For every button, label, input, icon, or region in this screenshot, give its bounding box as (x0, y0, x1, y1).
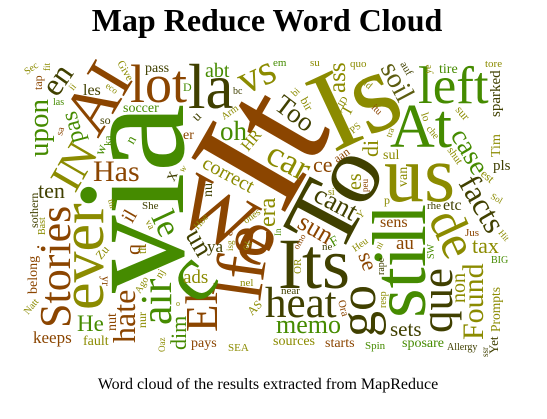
word: non: non (448, 273, 470, 303)
small words: bir (297, 94, 316, 113)
small words: Ora (335, 299, 351, 318)
small words: SEA (228, 342, 249, 354)
small words: SW (426, 243, 437, 259)
small words: ye (423, 64, 434, 74)
small words: Heu (350, 236, 370, 254)
small words: quo (350, 58, 367, 70)
small words: Ago (133, 275, 151, 296)
word: que: que (412, 268, 462, 333)
small words: resp (378, 291, 389, 308)
word: pas: pas (56, 109, 90, 146)
small words: p (384, 193, 390, 207)
small words: ni (373, 240, 385, 251)
small words: near (281, 285, 300, 297)
small words: nu (201, 183, 216, 197)
small words: She (142, 200, 159, 212)
small words: rhe (427, 200, 441, 212)
small words: Spin (365, 340, 386, 352)
small words: tap (31, 75, 45, 90)
word: us: us (384, 131, 455, 219)
small words: Y (355, 208, 367, 221)
small words: ones (241, 207, 263, 226)
word: ce: ce (313, 152, 333, 177)
small words: . (36, 232, 40, 252)
word: correct: correct (199, 152, 258, 198)
word: cant: cant (309, 179, 363, 227)
small words: em (273, 57, 287, 69)
small words: au (396, 233, 414, 254)
small words: Zu (93, 243, 112, 262)
small words: so (100, 113, 111, 127)
small words: Bast (37, 217, 48, 235)
small words: che (424, 124, 441, 142)
word: Has: Has (93, 155, 140, 188)
small words: ne (322, 241, 332, 253)
small words: starts (325, 336, 355, 351)
small words: sources (273, 334, 315, 349)
small words: b (125, 244, 150, 255)
small words: F (328, 233, 342, 250)
word: ass: ass (324, 62, 351, 93)
small words: n (123, 133, 140, 147)
small words: sul (383, 148, 399, 163)
small words: tire (439, 62, 458, 77)
small words: il (117, 205, 142, 226)
word: ads: ads (183, 267, 208, 288)
word: soil: soil (374, 57, 420, 107)
word: en: en (33, 57, 80, 102)
small words: Arm (219, 103, 241, 122)
word: le: le (144, 205, 188, 243)
word: abt: abt (205, 60, 230, 82)
word: de: de (418, 200, 489, 266)
small words: nur (135, 312, 149, 328)
word: At: At (390, 93, 452, 161)
small words: sposare (402, 336, 444, 351)
small words: Allergy (447, 342, 477, 353)
word: air: air (132, 278, 181, 325)
small words: auf (397, 60, 415, 78)
title: Map Reduce Word Cloud (92, 2, 442, 38)
word: El: El (177, 292, 227, 332)
word: AI: AI (48, 49, 147, 147)
small words: Prompts (488, 287, 503, 332)
small words: keeps (33, 328, 72, 347)
word: He: He (77, 311, 104, 336)
word: ten: ten (38, 178, 65, 203)
small words: las (53, 97, 64, 108)
small words: belong (26, 256, 41, 294)
word: It: It (155, 56, 364, 235)
small words: sid (358, 76, 374, 92)
word: Stories: Stories (31, 206, 80, 328)
small words: fault (83, 334, 109, 349)
small words: yr (99, 276, 113, 286)
small words: w (93, 142, 111, 157)
small words: tra (383, 126, 396, 139)
small words: pays (191, 336, 217, 351)
small words: Yet (486, 336, 501, 354)
small words: ID (336, 95, 351, 110)
small words: si (328, 187, 335, 198)
word: To: To (263, 128, 406, 268)
small words: PS (348, 121, 363, 136)
small words: bi (289, 86, 303, 99)
small words: sur (453, 103, 473, 123)
small words: shut (445, 145, 465, 167)
small words: D (183, 80, 192, 94)
word: We: We (162, 157, 296, 284)
small words: etc (443, 197, 462, 214)
small words: pls (493, 158, 511, 174)
word: lfe: lfe (200, 220, 286, 304)
small words: thr (106, 198, 118, 210)
small words: fit (42, 63, 52, 71)
word: lot: lot (130, 54, 187, 114)
small words: lo (418, 111, 433, 124)
small words: Jus (465, 227, 479, 239)
small words: peu (360, 179, 370, 192)
small words (22, 57, 512, 357)
word: era: era (255, 197, 281, 227)
small words: Sol (489, 191, 505, 206)
word: facts: facts (452, 168, 513, 239)
small words: ii (67, 81, 79, 93)
word: HR: HR (238, 126, 266, 155)
small words: th (135, 245, 149, 254)
small words: tore (485, 58, 502, 70)
small words: Hit (496, 228, 512, 243)
small words: itu (369, 102, 384, 118)
small words: aan (331, 144, 352, 165)
word: es: es (344, 173, 366, 190)
word: Its: Its (278, 224, 350, 304)
word: upon: upon (23, 98, 55, 157)
small words: ya (207, 237, 224, 256)
small words: x (159, 167, 181, 184)
small words: Natt (22, 296, 42, 317)
small words: ka (102, 136, 114, 146)
small words: van (396, 167, 411, 187)
small words: Hoe (192, 212, 211, 232)
small words: nut (105, 313, 120, 331)
word: un: un (180, 223, 220, 262)
word: hate: hate (106, 290, 142, 343)
word: left: left (418, 57, 489, 115)
word: memo: memo (276, 310, 341, 339)
small words: o (176, 299, 180, 308)
word: ever: ever (49, 203, 117, 310)
word: vs: vs (230, 47, 283, 104)
small words: soccer (123, 101, 159, 116)
word: go: go (330, 285, 387, 337)
word: sets: sets (390, 317, 422, 341)
word: IN: IN (40, 133, 107, 199)
word: Is: Is (290, 25, 419, 176)
small words: BIG (491, 255, 508, 266)
word: case: case (444, 123, 495, 180)
small words: pass (145, 61, 169, 76)
small words: Give (114, 58, 136, 83)
caption: Word cloud of the results extracted from MapReduce (98, 376, 438, 393)
small words: rape (376, 257, 387, 275)
small words: isg (225, 240, 235, 251)
small words: sens (380, 214, 408, 231)
small words: eco (104, 80, 120, 96)
word: heat: heat (265, 280, 337, 327)
small words: Sec (22, 60, 41, 77)
small words: est (478, 167, 498, 186)
word cloud (22, 25, 513, 357)
word: c: c (145, 235, 235, 319)
small words: er (183, 128, 194, 143)
small words: bc (233, 86, 243, 97)
small words: su (310, 57, 320, 69)
word: di: di (358, 140, 383, 157)
small words: Oaz (157, 338, 167, 352)
small words: sa (54, 125, 67, 137)
small words: nj (153, 267, 168, 280)
small words: OR (292, 258, 304, 274)
word: still: still (358, 204, 442, 318)
small words: ssr (480, 347, 490, 357)
small words: ok (240, 238, 255, 253)
small words: nel (240, 277, 253, 289)
word: tax: tax (472, 233, 499, 258)
small words: les (83, 82, 101, 99)
small words: In (273, 228, 283, 236)
small words: T (338, 102, 357, 119)
small words: sothern (27, 193, 41, 228)
word: car: car (260, 133, 318, 189)
word: la: la (188, 52, 234, 122)
small words: sparked (488, 70, 504, 117)
word: dim: dim (166, 316, 191, 350)
word: oh: oh (220, 116, 248, 146)
small words: AS (244, 297, 265, 318)
word: sun: sun (293, 207, 339, 250)
small words: Tim (489, 134, 504, 157)
small words: e (222, 230, 237, 236)
word: via: via (45, 104, 217, 293)
word: Found: Found (457, 263, 490, 340)
small words: va (142, 218, 157, 232)
small words: omo (291, 232, 308, 251)
small words: w (177, 162, 189, 174)
small words: u (189, 109, 205, 125)
word: se: se (353, 248, 383, 274)
word: Too: Too (269, 89, 321, 138)
